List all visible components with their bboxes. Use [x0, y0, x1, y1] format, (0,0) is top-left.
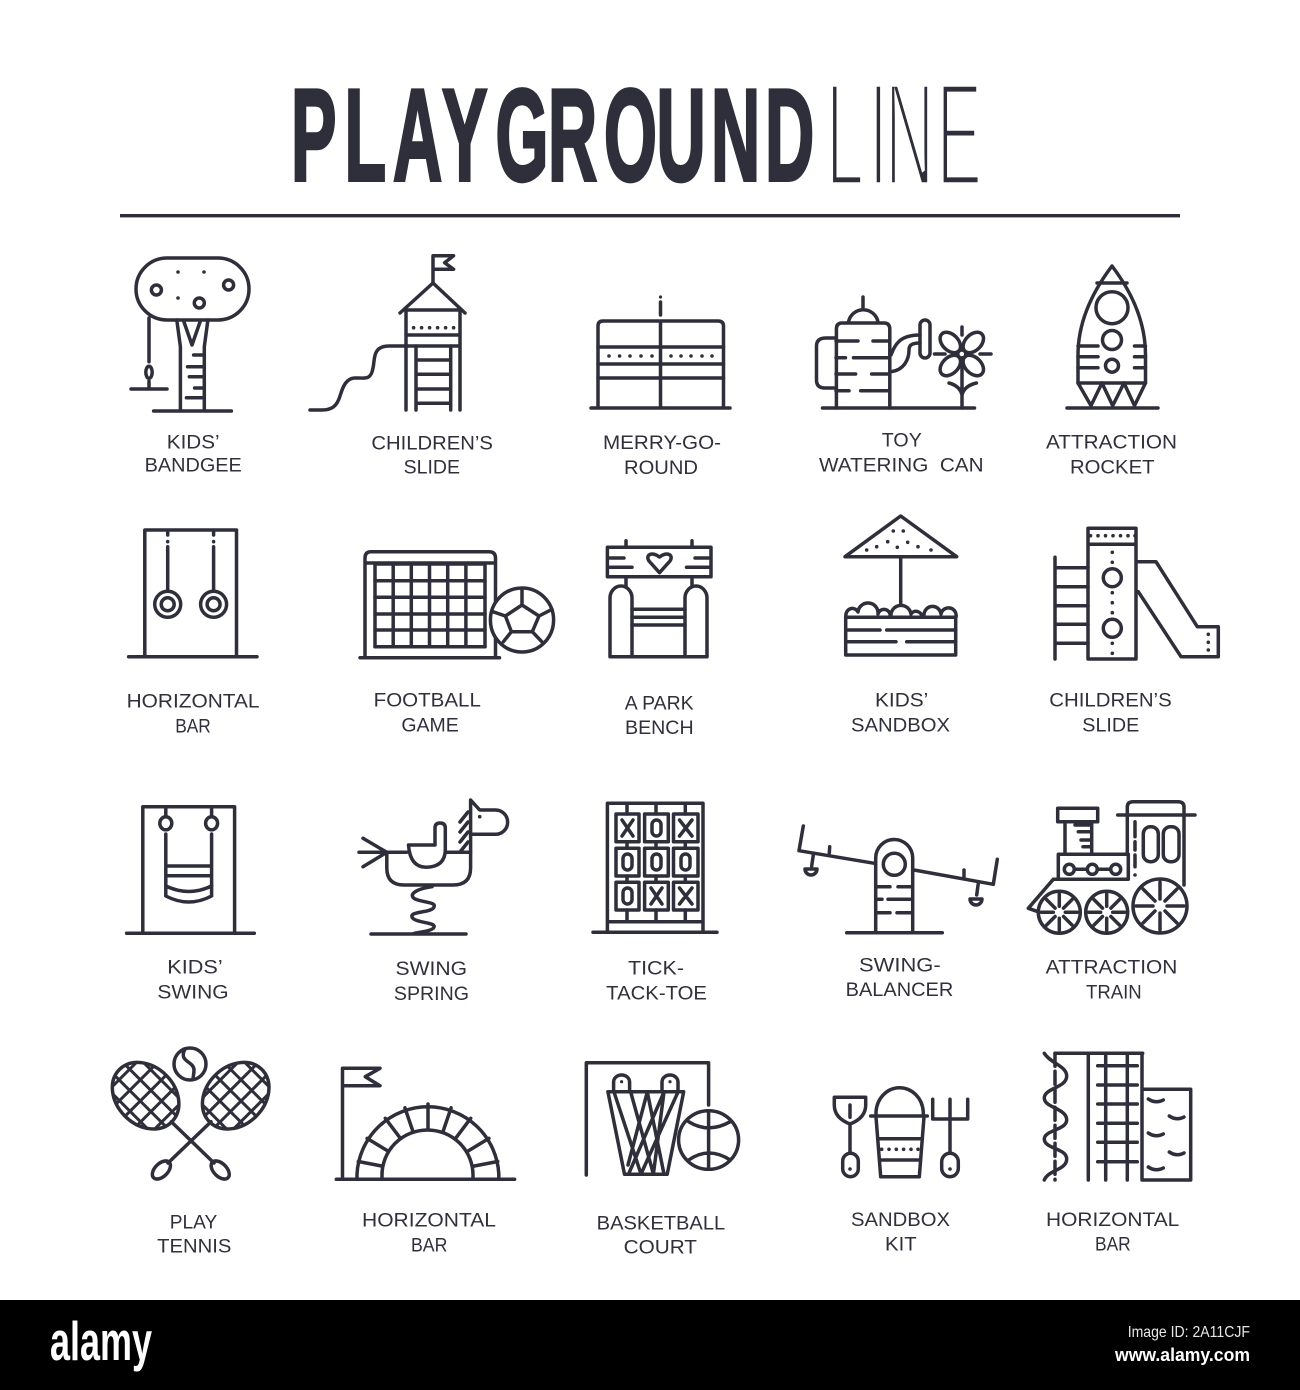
- label: football game: GAME: [401, 715, 459, 737]
- label: children's slide: [371, 432, 493, 478]
- icon: swing spring horse: [359, 800, 508, 934]
- label: horizontal bar: HORIZONTAL: [127, 690, 260, 712]
- label: attraction train: ATTRACTION: [1046, 956, 1177, 978]
- label: tick-tack-toe: TACK-TOE: [606, 982, 707, 1004]
- label: basketball court: BASKETBALL: [597, 1212, 725, 1234]
- icon: horizontal bar with rings: [129, 530, 257, 657]
- label: kids' swing: [157, 956, 229, 1003]
- icon: toy watering can: [816, 297, 991, 408]
- label: attraction rocket: ROCKET: [1070, 456, 1155, 478]
- label: swing spring: [394, 958, 469, 1005]
- label: children's slide: SLIDE: [1082, 715, 1139, 737]
- icon: tick-tack-toe board: [593, 803, 717, 932]
- label: children's slide: [1049, 690, 1172, 737]
- label: swing-balancer: SWING-: [859, 955, 941, 977]
- label: sandbox kit: [851, 1209, 950, 1256]
- label: toy watering can: TOY: [882, 430, 922, 452]
- label: horizontal bar: BAR: [1095, 1234, 1131, 1256]
- label: a park bench: A PARK: [625, 692, 694, 714]
- label: merry-go-round: MERRY-GO-: [603, 432, 721, 454]
- icon: basketball court: [586, 1063, 739, 1175]
- label: swing spring: SPRING: [394, 983, 469, 1005]
- footer bar: [0, 1300, 1300, 1390]
- label: horizontal bar: [127, 690, 260, 737]
- icon: kids' bandgee tree: [131, 258, 249, 411]
- label: sandbox kit: KIT: [885, 1234, 917, 1256]
- label: play tennis: [157, 1211, 231, 1258]
- label: horizontal bar: HORIZONTAL: [362, 1210, 496, 1232]
- label: kids' swing: KIDS’: [167, 956, 223, 978]
- label: attraction rocket: [1046, 431, 1177, 478]
- footer bar: www.alamy.com: [1114, 1344, 1250, 1365]
- label: tick-tack-toe: [606, 957, 707, 1004]
- label: kids' bandgee: BANDGEE: [145, 455, 242, 477]
- label: attraction train: TRAIN: [1086, 981, 1142, 1003]
- icon: children's slide tower: [310, 256, 465, 410]
- icon: kids' sandbox: [845, 516, 957, 655]
- icon: attraction rocket: [1067, 266, 1158, 408]
- label: swing-balancer: BALANCER: [846, 979, 953, 1001]
- icon: swing-balancer seesaw: [799, 826, 997, 933]
- icon: children's slide with ladder: [1055, 528, 1218, 659]
- label: basketball court: COURT: [624, 1236, 697, 1258]
- label: kids' swing: SWING: [157, 981, 229, 1003]
- title: LINE: [826, 53, 982, 218]
- icon: attraction train: [1028, 802, 1195, 933]
- label: kids' bandgee: [145, 431, 242, 477]
- icon: climbing wall horizontal bar: [1044, 1053, 1191, 1180]
- label: toy watering can: [819, 430, 984, 477]
- label: merry-go-round: [603, 432, 721, 479]
- icon: football goal and ball: [360, 552, 554, 658]
- label: play tennis: TENNIS: [157, 1236, 231, 1258]
- label: a park bench: [625, 692, 694, 739]
- label: kids' sandbox: KIDS’: [875, 690, 928, 712]
- label: football game: FOOTBALL: [374, 690, 481, 712]
- label: horizontal bar: BAR: [175, 715, 211, 737]
- label: swing-balancer: [846, 955, 953, 1001]
- icon: arch horizontal bar with flag: [336, 1068, 515, 1179]
- label: kids' sandbox: SANDBOX: [851, 715, 950, 737]
- icon: merry-go-round: [591, 295, 730, 408]
- title: PLAYGROUND: [291, 62, 814, 209]
- label: children's slide: SLIDE: [404, 456, 460, 478]
- label: play tennis: PLAY: [170, 1211, 217, 1233]
- label: a park bench: BENCH: [625, 717, 694, 739]
- label: toy watering can: WATERING CAN: [819, 455, 984, 477]
- footer bar: alamy: [50, 1310, 152, 1372]
- title: [291, 53, 982, 218]
- label: attraction train: [1046, 956, 1177, 1003]
- icon: sandbox kit: [834, 1088, 968, 1177]
- label: tick-tack-toe: TICK-: [628, 957, 684, 979]
- label: swing spring: SWING: [396, 958, 467, 980]
- label: horizontal bar: HORIZONTAL: [1046, 1209, 1179, 1231]
- label: horizontal bar: [1046, 1209, 1179, 1256]
- label: kids' sandbox: [851, 690, 950, 737]
- label: children's slide: CHILDREN’S: [1049, 690, 1172, 712]
- icon: tennis rackets and ball: [110, 1046, 271, 1181]
- footer bar: Image ID: 2A11CJF: [1128, 1324, 1250, 1341]
- label: children's slide: CHILDREN’S: [371, 432, 493, 454]
- label: kids' bandgee: KIDS’: [167, 431, 220, 453]
- label: sandbox kit: SANDBOX: [851, 1209, 950, 1231]
- label: merry-go-round: ROUND: [624, 457, 698, 479]
- icon: kids' swing: [127, 807, 254, 933]
- label: attraction rocket: ATTRACTION: [1046, 431, 1177, 453]
- header rule: [120, 214, 1180, 217]
- label: basketball court: [597, 1212, 725, 1258]
- label: horizontal bar: BAR: [411, 1235, 447, 1257]
- label: football game: [374, 690, 481, 737]
- icon: park bench: [607, 541, 711, 657]
- label: horizontal bar: [362, 1210, 496, 1257]
